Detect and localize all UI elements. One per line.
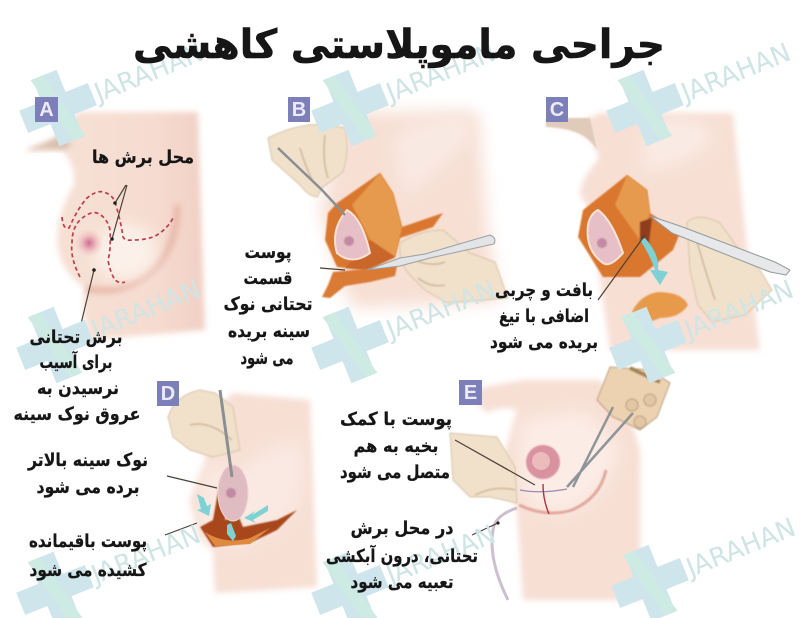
label B: تحتانی نوک [224, 294, 312, 315]
label B: می شود [240, 348, 294, 369]
label E: drain: در محل برش [350, 518, 454, 539]
panel B: skin flaps with scalpel [268, 112, 508, 308]
raised nipple D [218, 465, 248, 521]
label A: lower incision: عروق نوک سینه [14, 404, 140, 425]
leaders E [455, 440, 535, 535]
label A: lower incision: نرسیدن به [37, 378, 119, 399]
scalpel C [650, 216, 790, 275]
left hand E [450, 433, 517, 503]
badge E: E [464, 382, 477, 404]
nipple A [74, 228, 104, 258]
label C [490, 280, 598, 353]
watermarks: JARAHAN [88, 38, 208, 110]
panel C: excess tissue removal [545, 113, 790, 350]
exposed tissue D [200, 480, 297, 547]
badge A [35, 97, 58, 122]
hand C [687, 217, 772, 322]
right hand E [597, 367, 670, 430]
incisions E [520, 489, 567, 492]
leader C [598, 235, 645, 300]
label A: lower incision: برش تحتانی [30, 327, 122, 348]
watermarks: JARAHAN [680, 513, 800, 585]
label E: sutures: بخیه به هم [354, 436, 438, 457]
label C: بافت و چربی [495, 280, 593, 301]
upper hand B [268, 125, 347, 197]
drain tube [492, 508, 517, 600]
badge D [157, 381, 179, 406]
arrows D [197, 494, 268, 541]
label B: سینه بریده [228, 321, 310, 342]
dashed incision lines [62, 192, 173, 283]
excised fat piece [632, 292, 688, 323]
label A: incision site: محل برش ها [92, 147, 194, 168]
label E: sutures: پوست با کمک [340, 409, 452, 430]
badge B [288, 97, 310, 122]
label E: drain: تعبیه می شود [350, 572, 454, 593]
label D: remaining skin [29, 531, 147, 581]
label D: remaining skin: پوست باقیمانده [29, 531, 147, 552]
scalpel B [367, 235, 495, 270]
badge D: D [161, 383, 175, 405]
title: جراحی ماموپلاستی کاهشی [133, 22, 665, 68]
panel E: sutured breast [450, 367, 670, 600]
watermarks: JARAHAN [678, 275, 798, 347]
label A: lower incision: برای آسیب [40, 350, 112, 373]
forceps B [278, 148, 345, 215]
watermarks: JARAHAN [380, 275, 500, 347]
badge C: C [550, 99, 564, 121]
watermarks: JARAHAN [380, 38, 500, 110]
label E: drain [326, 518, 478, 593]
label B: قسمت [244, 268, 292, 289]
leaders D [165, 476, 217, 535]
forceps D [220, 390, 232, 477]
badge B: B [292, 99, 306, 121]
leader B [320, 268, 345, 270]
label E: drain: تحتانی، درون آبکشی [326, 544, 478, 567]
lower hand B [400, 230, 508, 303]
tools E [567, 407, 633, 487]
label E: sutures: متصل می شود [340, 462, 450, 483]
badge E [459, 380, 482, 405]
label D: nipple raised: برده می شود [36, 477, 140, 498]
arrow C [640, 238, 668, 285]
label B: پوست [244, 242, 292, 263]
watermarks: JARAHAN [675, 38, 795, 110]
watermarks: JARAHAN [85, 275, 205, 347]
badge C [546, 97, 568, 122]
label D: remaining skin: کشیده می شود [30, 560, 147, 581]
watermarks: JARAHAN [380, 520, 500, 592]
label D: nipple raised [27, 450, 148, 498]
label C: اضافی با تیغ [499, 306, 589, 327]
panel D: nipple raised [165, 390, 317, 593]
label E: sutures [340, 409, 452, 483]
label D: nipple raised: نوک سینه بالاتر [27, 450, 148, 471]
leader lines A [80, 185, 127, 328]
areola E [526, 445, 560, 479]
label B [224, 242, 312, 369]
badge A: A [39, 99, 54, 121]
label C: بریده می شود [490, 332, 598, 353]
panel A: marked breast [26, 112, 205, 340]
watermarks: JARAHAN [85, 520, 205, 592]
label A: lower incision [14, 327, 140, 425]
hand D [168, 390, 240, 457]
